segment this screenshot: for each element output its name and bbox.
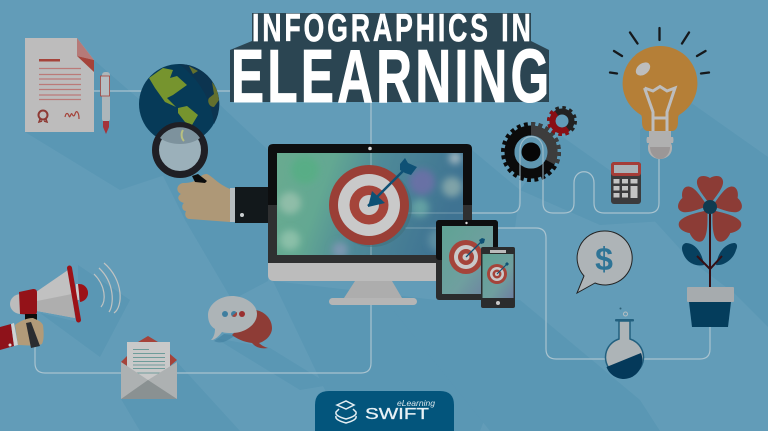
- pen icon: [100, 72, 110, 134]
- hand: [0, 318, 44, 350]
- logo wordmark: SWIFT: [365, 406, 429, 423]
- logo badge: [315, 391, 454, 431]
- target on monitor: [329, 158, 417, 247]
- lightbulb icon: [610, 28, 709, 159]
- dollar speech bubble: [577, 231, 632, 293]
- sound waves: [94, 263, 120, 313]
- title line 1: INFOGRAPHICS IN: [252, 7, 531, 50]
- logo tagline: eLearning: [397, 398, 435, 408]
- calculator icon: [611, 162, 641, 204]
- title line 2: ELEARNING: [231, 35, 549, 119]
- globe icon: [139, 64, 219, 144]
- flower pot: [687, 287, 734, 327]
- envelope icon: [121, 336, 177, 399]
- connector lines: [35, 91, 710, 373]
- phone icon: [481, 247, 515, 308]
- logo mark: [336, 401, 356, 423]
- title banner: [230, 7, 549, 119]
- chat bubbles: [208, 296, 272, 348]
- flower icon: [676, 176, 744, 327]
- monitor icon: [268, 144, 472, 305]
- tablet icon: [436, 220, 498, 300]
- monitor screen: [277, 152, 463, 258]
- megaphone: [10, 268, 88, 320]
- dollar speech bubble: $: [595, 241, 613, 277]
- small gear icon: [549, 108, 575, 134]
- flask icon: [606, 308, 644, 379]
- document icon: [25, 38, 94, 132]
- large gear icon: [504, 124, 558, 180]
- magnifier: [156, 126, 204, 174]
- hand holding magnifier: [156, 126, 269, 223]
- megaphone with hand: [0, 263, 120, 350]
